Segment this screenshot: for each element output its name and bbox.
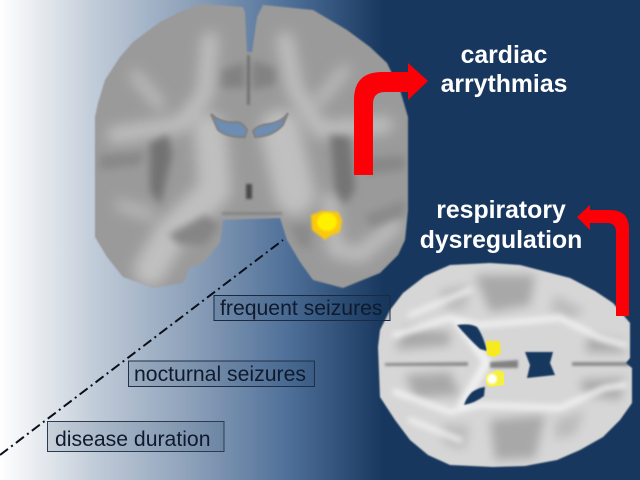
coronal brain slice bbox=[90, 0, 415, 295]
infographic canvas: dysregulation bbox=[420, 227, 582, 254]
label: disease duration bbox=[48, 422, 224, 452]
axial brain slice bbox=[375, 262, 635, 470]
heading: respiratory dysregulation: respiratory bbox=[436, 197, 566, 224]
yellow activation spots bbox=[486, 341, 504, 387]
label: nocturnal seizures: nocturnal seizures bbox=[134, 363, 306, 386]
dash-dot trend line bbox=[0, 240, 283, 455]
heading: cardiac arrythmias: cardiac bbox=[461, 42, 548, 69]
arrow: to respiratory dysregulation bbox=[577, 205, 629, 316]
arrow: to cardiac arrythmias bbox=[354, 63, 428, 175]
ventricles bbox=[211, 113, 288, 137]
label: frequent seizures: frequent seizures bbox=[220, 297, 383, 320]
yellow activation bbox=[311, 211, 342, 240]
label: disease duration: disease duration bbox=[55, 428, 210, 451]
ventricles bbox=[457, 324, 555, 405]
infographic canvas: arrythmias bbox=[441, 71, 567, 98]
